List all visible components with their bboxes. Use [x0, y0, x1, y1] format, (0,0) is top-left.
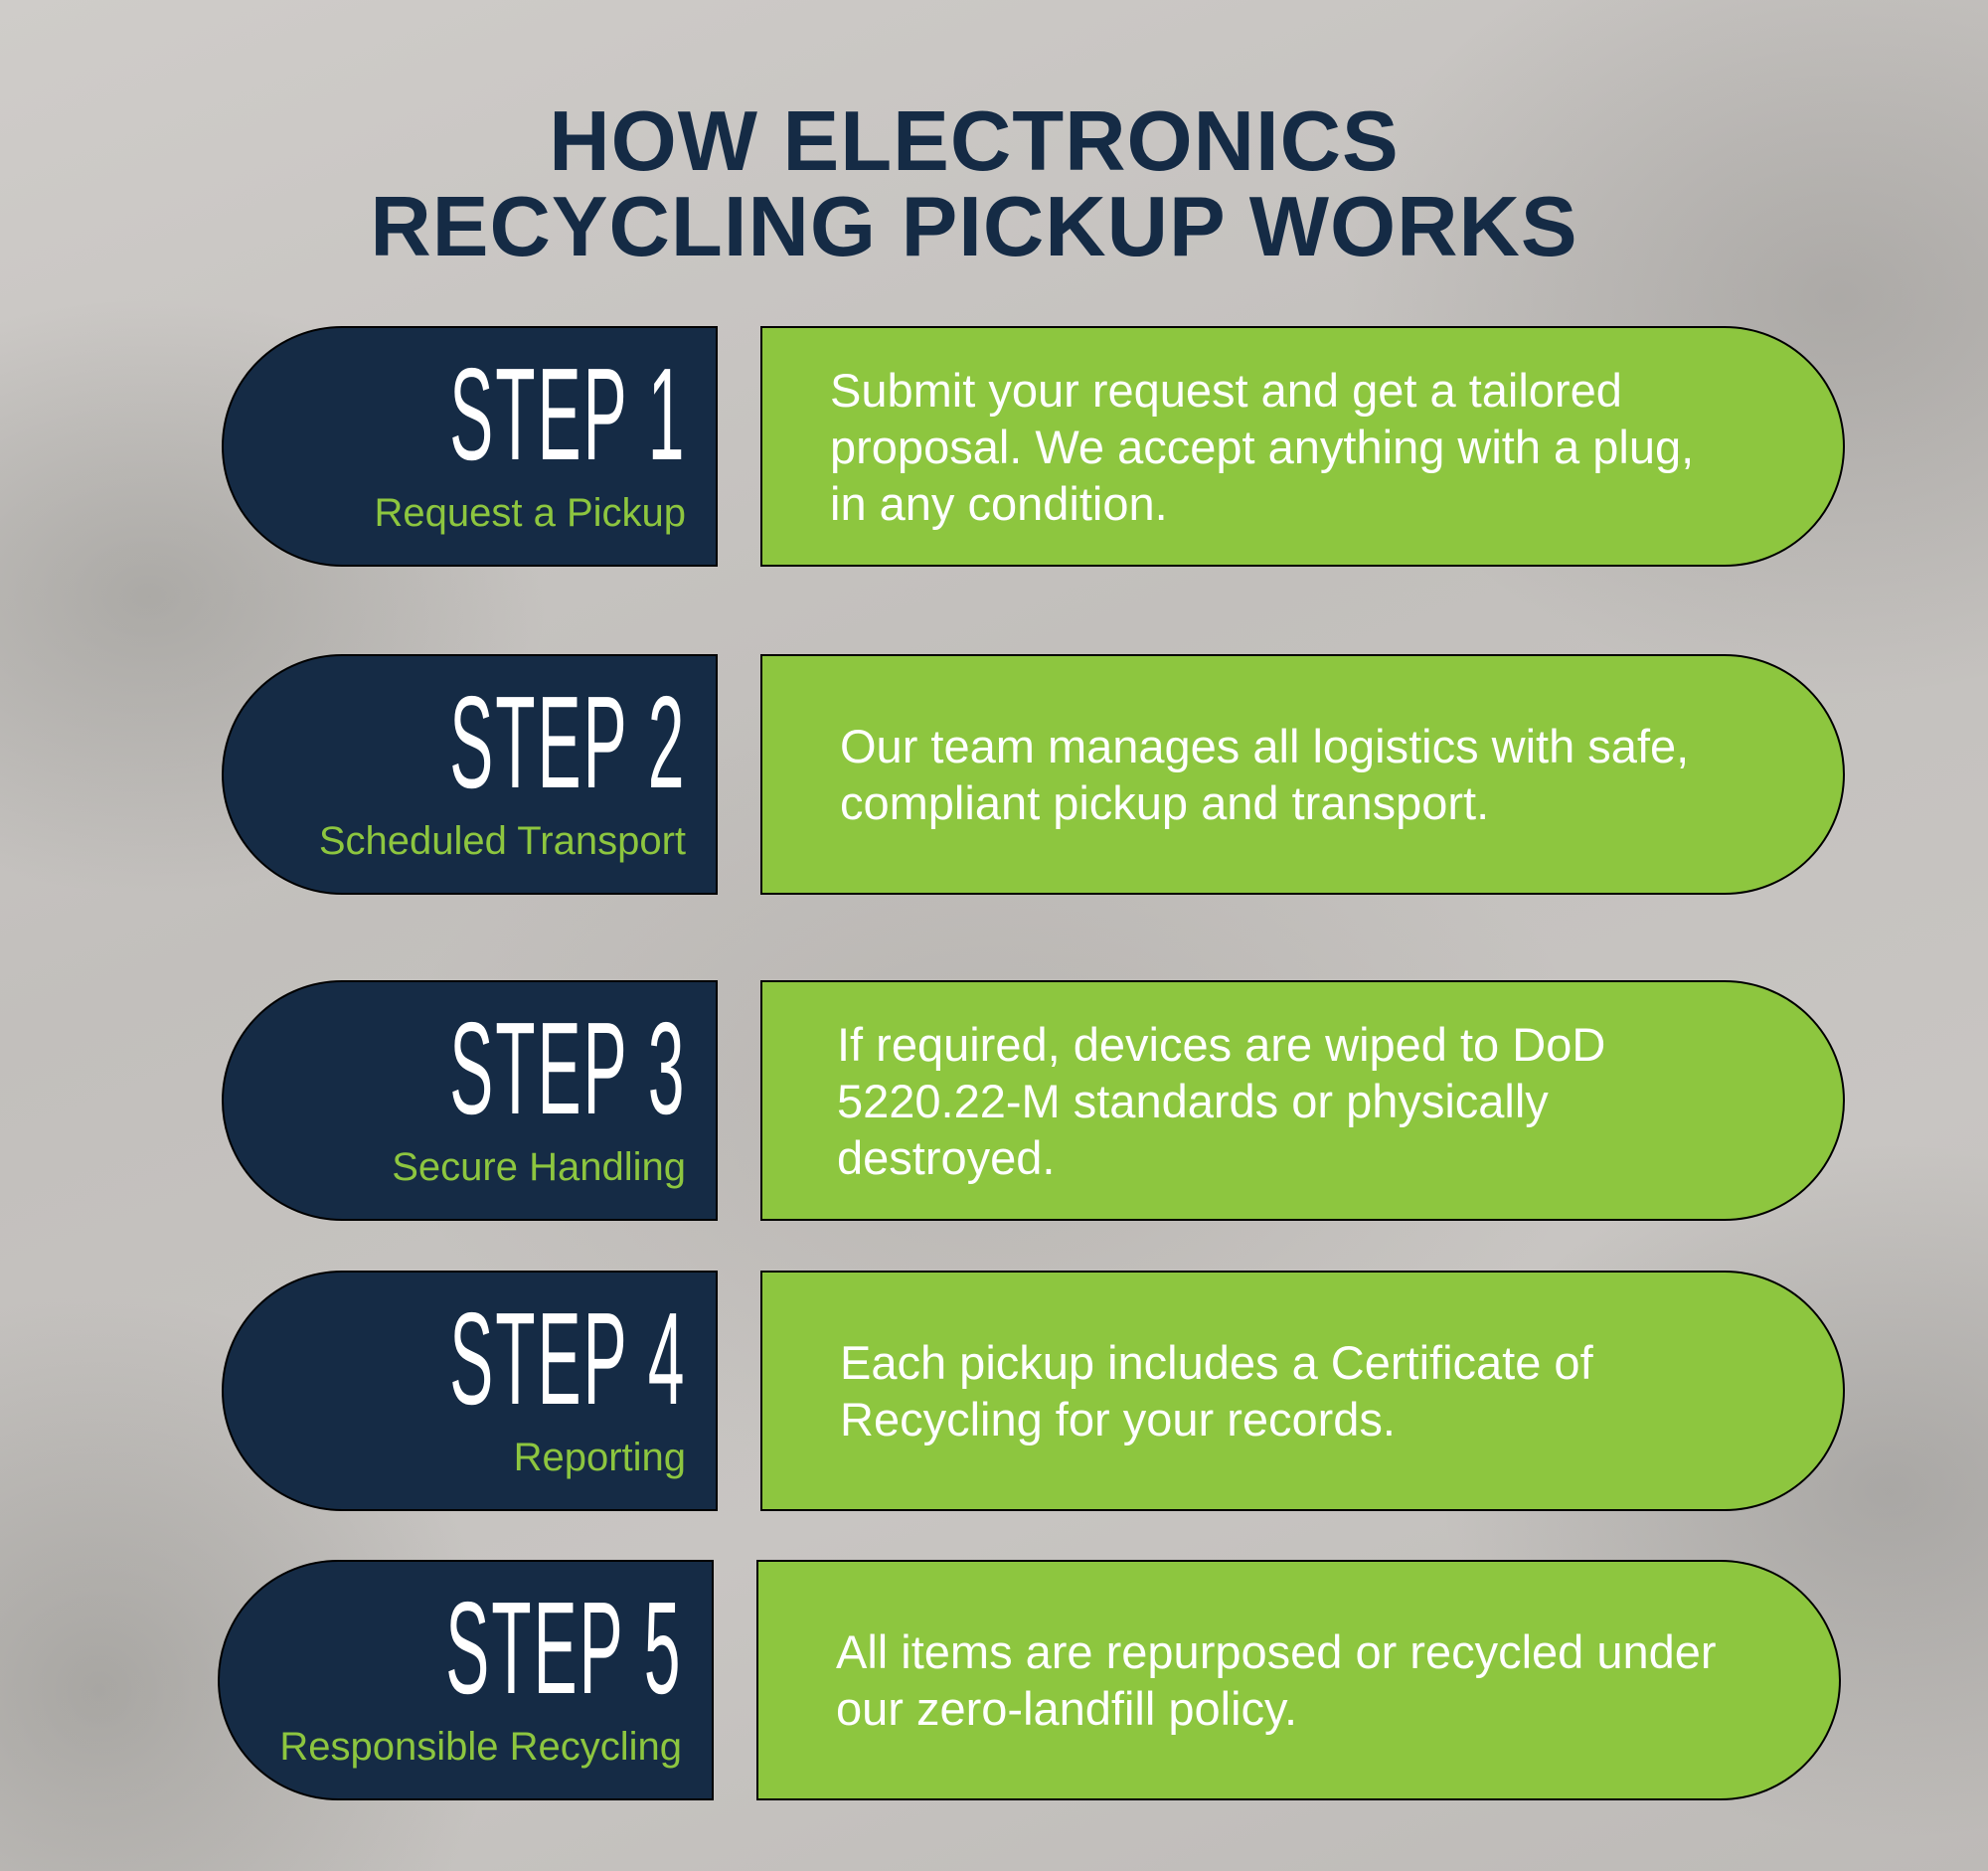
- step 2 label: STEP 2: [449, 669, 686, 815]
- step 3 label: Secure Handling: [392, 1145, 686, 1189]
- step 4 label: [222, 1271, 718, 1511]
- step 3 label: [222, 980, 718, 1221]
- step 2 description: Our team manages all logistics with safe, compliant pickup and transport.: [840, 720, 1689, 829]
- step 2 description: [760, 654, 1845, 895]
- step 1 description: [760, 326, 1845, 567]
- step 1 description: Submit your request and get a tailored proposal. We accept anything with a plug, in any condition.: [830, 364, 1694, 529]
- step 5 label: [218, 1560, 714, 1800]
- step 3 description: If required, devices are wiped to DoD 5220.22-M standards or physically destroyed.: [837, 1018, 1605, 1183]
- title: HOW ELECTRONICS: [549, 94, 1400, 189]
- step 5 description: [756, 1560, 1841, 1800]
- step 3 description: [760, 980, 1845, 1221]
- title: RECYCLING PICKUP WORKS: [370, 180, 1578, 274]
- step 4 description: Each pickup includes a Certificate of Recycling for your records.: [840, 1336, 1593, 1446]
- step 5 label: Responsible Recycling: [279, 1725, 682, 1769]
- step 1 label: Request a Pickup: [374, 491, 686, 535]
- step 2 label: [222, 654, 718, 895]
- step 1 label: STEP 1: [449, 341, 686, 487]
- step 2 label: Scheduled Transport: [319, 819, 686, 863]
- step 3 label: STEP 3: [449, 995, 686, 1141]
- step 4 label: Reporting: [514, 1436, 686, 1479]
- step 5 label: STEP 5: [445, 1575, 682, 1721]
- step 1 label: [222, 326, 718, 567]
- step 4 description: [760, 1271, 1845, 1511]
- step 5 description: All items are repurposed or recycled under our zero-landfill policy.: [836, 1625, 1717, 1735]
- step 4 label: STEP 4: [449, 1285, 686, 1432]
- title: [370, 94, 1578, 274]
